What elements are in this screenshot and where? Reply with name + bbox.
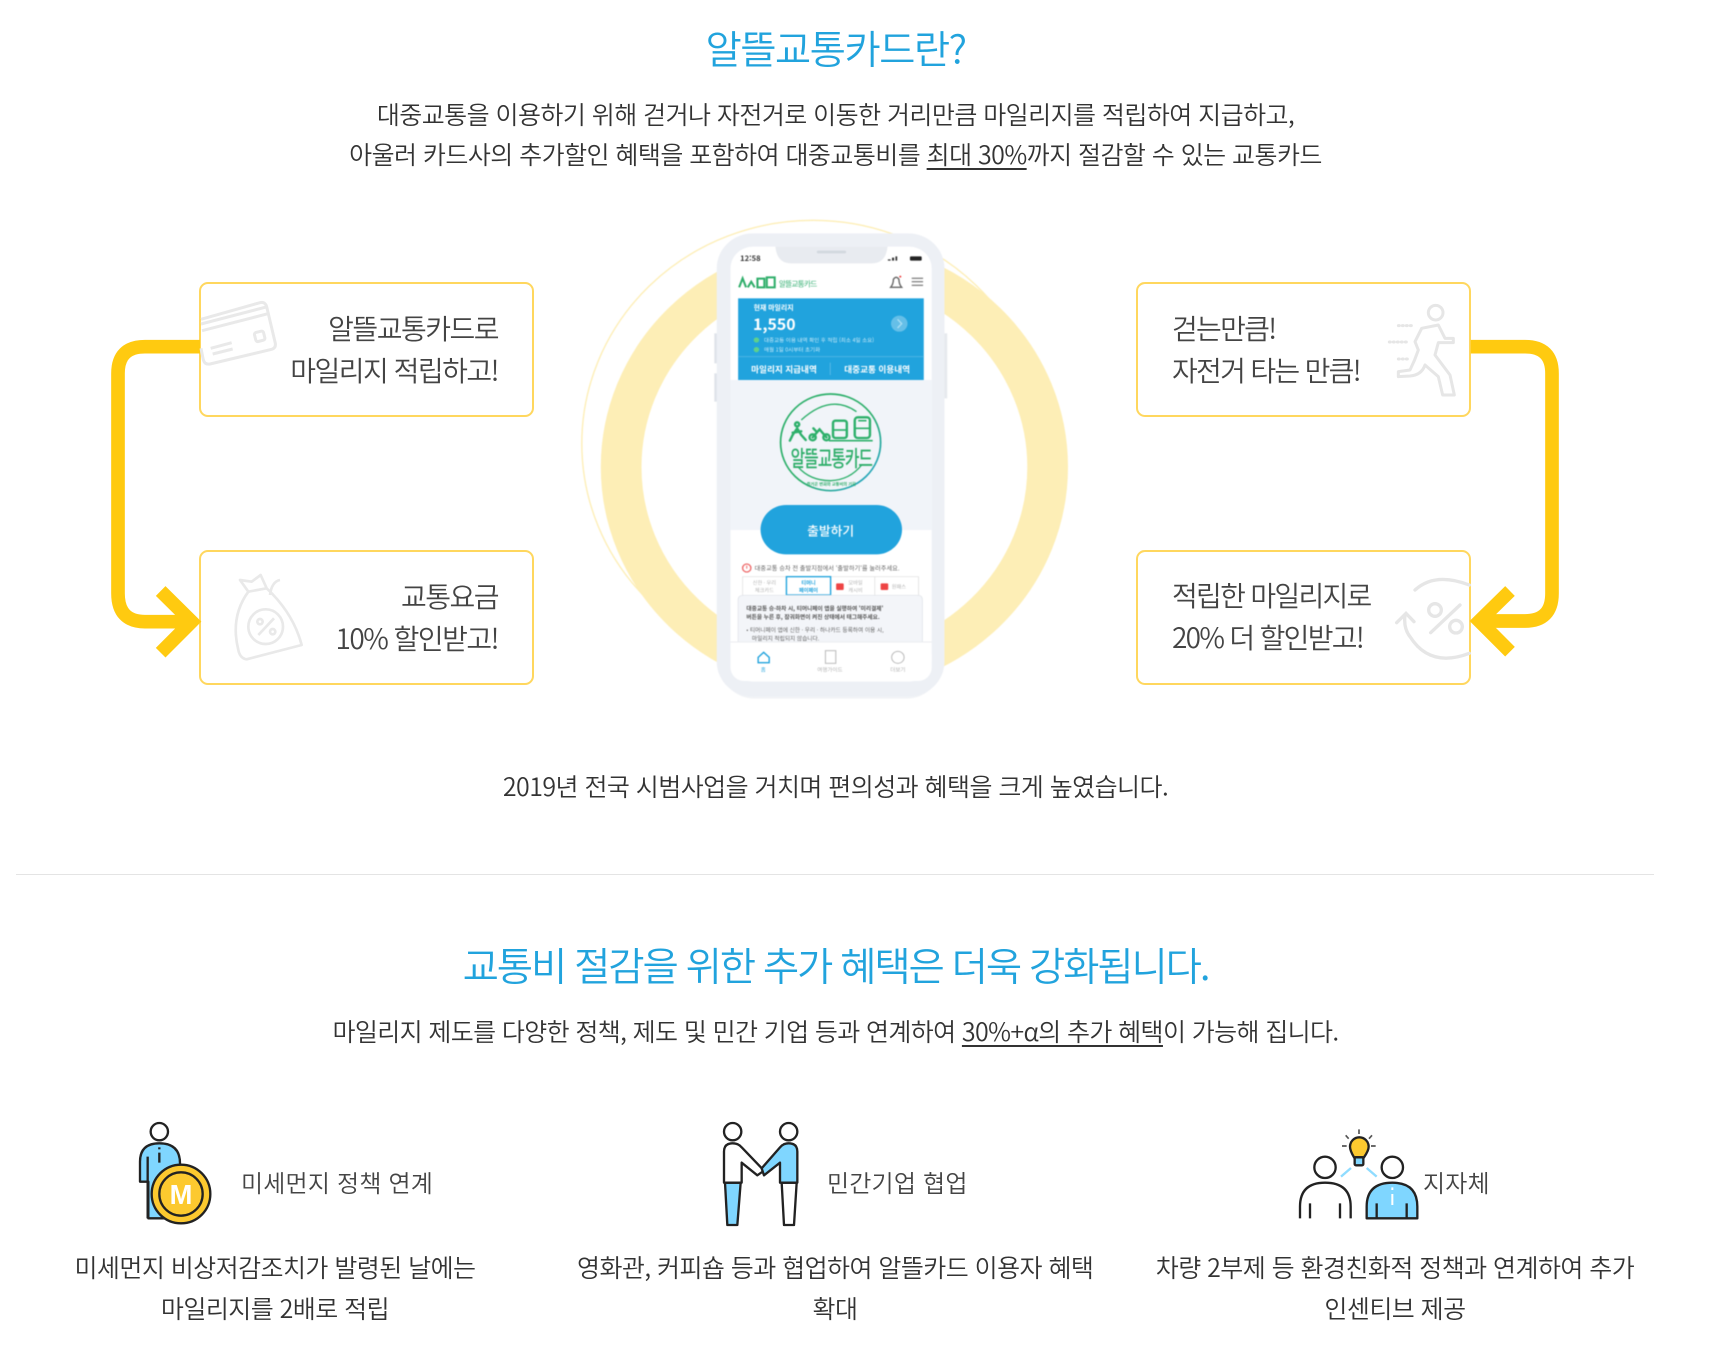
icon: person with M coin	[138, 1122, 212, 1224]
mileage panel: 대중교통 이용 내역 확인 후 적립 (최소 4일 소요)	[764, 336, 874, 344]
icon: runner	[1389, 305, 1454, 395]
text: card 1: 알뜰교통카드로	[328, 308, 498, 348]
card tabs: 신한 · 우리	[753, 579, 776, 586]
card tabs: 페이페이	[799, 587, 818, 594]
start button	[761, 505, 902, 554]
intro text: 아울러 카드사의 추가할인 혜택을 포함하여 대중교통비를 최대 30%까지 절감할 수 있는 교통카드	[349, 136, 1322, 172]
text: card 2	[335, 576, 498, 658]
logo badge: 알뜰교통카드	[791, 441, 872, 474]
arrow: left loop	[118, 347, 200, 653]
text: benefit 1: 마일리지를 2배로 적립	[161, 1290, 389, 1326]
app header	[739, 276, 923, 289]
screen body background	[731, 380, 932, 530]
text: card 4: 적립한 마일리지로	[1172, 575, 1371, 615]
text: benefit 2: 확대	[813, 1290, 857, 1326]
notice row: 대중교통 승차 전 출발지점에서 '출발하기'를 눌러주세요.	[755, 564, 900, 573]
status bar	[740, 253, 922, 264]
bottom nav	[731, 642, 932, 681]
text: card 4: 20% 더 할인받고!	[1172, 617, 1363, 657]
panel: 추가 할인 카드 오른쪽 아래	[1136, 550, 1471, 685]
intro text	[349, 96, 1322, 172]
logo badge	[781, 394, 881, 491]
text: benefit 1: 미세먼지 비상저감조치가 발령된 날에는	[74, 1249, 476, 1285]
phone body	[714, 233, 947, 699]
text: card 3: 걷는만큼!	[1172, 308, 1275, 348]
mileage panel: 현재 마일리지	[754, 302, 794, 312]
text: benefit 3: 인센티브 제공	[1324, 1290, 1466, 1326]
caption: 지자체: 지자체	[1423, 1164, 1490, 1199]
card tabs	[743, 577, 919, 595]
bottom nav: 여행가이드	[817, 666, 843, 674]
text: benefit 3: 차량 2부제 등 환경친화적 정책과 연계하여 추가	[1156, 1249, 1634, 1285]
text: card 2: 10% 할인받고!	[335, 618, 498, 658]
guide panel: 버튼을 누른 후, 잠궈화면이 켜진 상태에서 태그해주세요.	[746, 613, 880, 621]
status bar: 12:58	[740, 253, 761, 264]
caption: 미세먼지 정책 연계: 미세먼지 정책 연계	[241, 1164, 433, 1199]
text: benefit 3	[1156, 1249, 1634, 1326]
start button: 출발하기	[807, 521, 854, 539]
yellow rings	[582, 220, 1048, 673]
icon: card	[201, 302, 275, 364]
arrow and icons: left	[111, 301, 303, 660]
title: 알뜰교통카드란?: 알뜰교통카드란?	[705, 19, 966, 76]
text: benefit 2: 영화관, 커피숍 등과 협업하여 알뜰카드 이용자 혜택	[577, 1249, 1093, 1285]
card tabs: 원패스	[892, 584, 906, 591]
card tabs: 티머니	[801, 579, 816, 586]
mileage panel: 매월 1일 0시부터 초기화	[764, 346, 820, 354]
divider	[16, 874, 1654, 875]
card tabs: 모바일	[848, 579, 863, 586]
card tabs: 체크카드	[755, 587, 774, 594]
guide panel: • 티머니페이 앱에 신한 · 우리 · 하나카드 등록하여 이용 시,	[746, 626, 884, 634]
text: benefit 1	[74, 1249, 476, 1326]
text: card 1: 마일리지 적립하고!	[290, 350, 498, 390]
panel: 적립 카드 왼쪽 위	[199, 282, 534, 417]
icon: percent refresh	[1397, 579, 1469, 658]
panel: 걷는만큼 카드 오른쪽 위	[1136, 282, 1471, 417]
heading: 추가 혜택: 교통비 절감을 위한 추가 혜택은 더욱 강화됩니다.	[463, 936, 1208, 993]
icon: person with M coin: M	[170, 1179, 192, 1210]
icon: people and lightbulb	[1298, 1129, 1418, 1220]
intro text: 대중교통을 이용하기 위해 걷거나 자전거로 이동한 거리만큼 마일리지를 적립하여 지급하고,	[377, 96, 1294, 132]
bottom nav: 더보기	[890, 666, 906, 674]
app header: 알뜰교통카드	[779, 278, 817, 289]
caption: 민간기업 협업: 민간기업 협업	[827, 1164, 968, 1199]
icon: money bag	[236, 575, 302, 659]
text: card 2: 교통요금	[401, 576, 498, 616]
guide panel: 마일리지 적립되지 않습니다.	[752, 635, 820, 643]
mileage panel: 대중교통 이용내역	[844, 363, 910, 375]
phone notch	[775, 247, 888, 263]
text: card 1	[290, 308, 498, 390]
guide panel: 대중교통 승·하차 시, 티머니페이 앱을 실행하여 '미리결제'	[746, 605, 884, 613]
logo badge: 즐거운 변화와 교통비의 기회	[807, 480, 856, 487]
card tabs: 캐시비	[848, 587, 863, 594]
mileage panel: 마일리지 지급내역	[751, 363, 817, 375]
text: benefit 2	[577, 1249, 1093, 1326]
text: 추가 혜택 설명: 마일리지 제도를 다양한 정책, 제도 및 민간 기업 등과 연계하여 30%+α의 추가 혜택이 가능해 집니다.	[332, 1013, 1339, 1049]
text: card 3	[1172, 308, 1360, 390]
icon: handshake	[722, 1122, 798, 1226]
mileage panel	[738, 298, 924, 380]
guide panel	[738, 595, 922, 643]
text: card 3: 자전거 타는 만큼!	[1172, 350, 1360, 390]
bottom nav: 홈	[761, 666, 766, 674]
text: card 4	[1172, 575, 1371, 657]
mileage panel: 1,550	[753, 313, 796, 335]
arrow: right loop	[1471, 347, 1552, 652]
panel: 할인 카드 왼쪽 아래	[199, 550, 534, 685]
text: pilot statement: 2019년 전국 시범사업을 거치며 편의성과 혜택을 크게 높였습니다.	[503, 768, 1168, 804]
arrow and icons: right	[1388, 304, 1559, 660]
phone illustration	[580, 219, 1068, 698]
